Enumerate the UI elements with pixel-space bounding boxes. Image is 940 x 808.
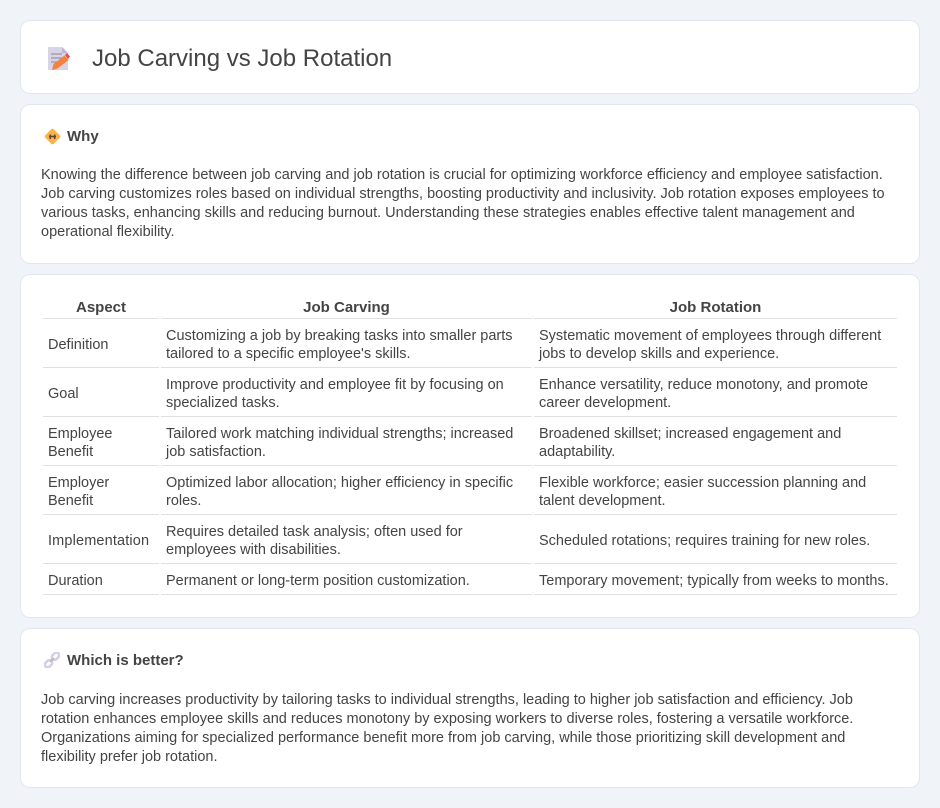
- row: employee benefit: job satisfaction.: [166, 444, 266, 460]
- row: employee benefit: Tailored work matching individual strengths; increased: [166, 426, 513, 442]
- row: employer benefit: Benefit: [48, 493, 93, 509]
- row: duration: Permanent or long-term position customization.: [166, 573, 470, 589]
- table header: aspect: Aspect: [76, 299, 126, 316]
- row: employee benefit: Employee: [48, 426, 112, 442]
- row: implementation: Requires detailed task analysis; often used for: [166, 524, 463, 540]
- text: why: Job carving customizes roles based on individual strengths, boosting productivity and inclusivity. Job rotation exposes employees to: [41, 186, 885, 202]
- row: employer benefit: Flexible workforce; easier succession planning and: [539, 475, 866, 491]
- panel: which is better: [20, 628, 920, 788]
- row: employer benefit: [43, 475, 897, 515]
- row: definition: Definition: [48, 337, 108, 353]
- row: goal: [43, 377, 897, 417]
- row: duration: Duration: [48, 573, 103, 589]
- row: implementation: employees with disabilities.: [166, 542, 341, 558]
- panel: header: [20, 20, 920, 94]
- table header: aspect: [43, 299, 159, 319]
- row: definition: jobs to develop skills and experience.: [539, 346, 779, 362]
- row: definition: tailored to a specific employee's skills.: [166, 346, 411, 362]
- row: employee benefit: Benefit: [48, 444, 93, 460]
- row: duration: Temporary movement; typically from weeks to months.: [539, 573, 889, 589]
- text: why: Knowing the difference between job carving and job rotation is crucial for optimizing workforce efficiency and employee satisfaction.: [41, 167, 883, 183]
- row: employee benefit: adaptability.: [539, 444, 615, 460]
- text: why: [41, 167, 885, 240]
- heading: why: Why: [67, 128, 99, 145]
- title: Job Carving vs Job Rotation: [92, 45, 392, 72]
- table header: job carving: Job Carving: [303, 299, 390, 316]
- text: why: various tasks, enhancing skills and reducing burnout. Understanding these strategies enables effective talent management and: [41, 205, 855, 221]
- heading: which is better: Which is better?: [67, 652, 184, 669]
- row: goal: Enhance versatility, reduce monotony, and promote: [539, 377, 868, 393]
- text: which is better: Job carving increases productivity by tailoring tasks to individual strengths, leading to higher job satisfaction and efficiency. Job: [41, 692, 853, 708]
- icon: link: [44, 652, 60, 668]
- table header: job carving: [161, 299, 532, 319]
- row: goal: Goal: [48, 386, 79, 402]
- row: goal: career development.: [539, 395, 671, 411]
- row: employee benefit: [43, 426, 897, 466]
- icon: memo with pencil: [48, 47, 70, 70]
- panel: comparison table: [20, 274, 920, 618]
- row: goal: specialized tasks.: [166, 395, 280, 411]
- row: goal: Improve productivity and employee fit by focusing on: [166, 377, 504, 393]
- row: implementation: [43, 524, 897, 564]
- text: which is better: Organizations aiming for specialized performance benefit more from job carving, while those prioritizing skill development and: [41, 730, 845, 746]
- row: definition: [43, 328, 897, 368]
- row: employer benefit: talent development.: [539, 493, 666, 509]
- row: implementation: Implementation: [48, 533, 149, 549]
- row: definition: Systematic movement of employees through different: [539, 328, 881, 344]
- table header: job rotation: [534, 299, 897, 319]
- table header: job rotation: Job Rotation: [670, 299, 761, 316]
- row: implementation: Scheduled rotations; requires training for new roles.: [539, 533, 870, 549]
- text: which is better: [41, 692, 853, 765]
- text: which is better: rotation enhances employee skills and reduces monotony by exposing workers to diverse roles, fostering a versatile workforce.: [41, 711, 853, 727]
- row: employer benefit: Employer: [48, 475, 109, 491]
- row: duration: [43, 573, 897, 595]
- icon: warning diamond: [44, 128, 60, 144]
- row: definition: Customizing a job by breaking tasks into smaller parts: [166, 328, 513, 344]
- text: which is better: flexibility prefer job rotation.: [41, 749, 218, 765]
- row: employer benefit: roles.: [166, 493, 201, 509]
- row: employer benefit: Optimized labor allocation; higher efficiency in specific: [166, 475, 513, 491]
- text: why: operational flexibility.: [41, 224, 175, 240]
- row: employee benefit: Broadened skillset; increased engagement and: [539, 426, 841, 442]
- panel: why: [20, 104, 920, 264]
